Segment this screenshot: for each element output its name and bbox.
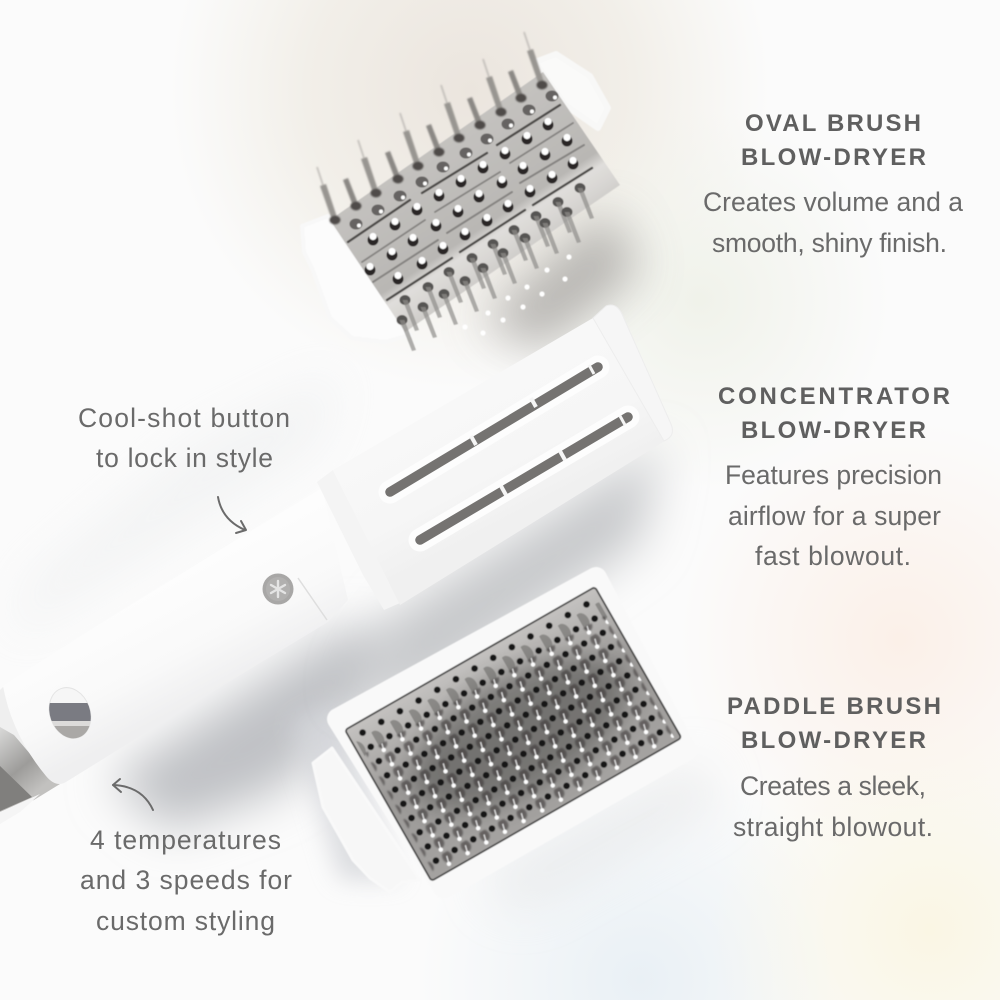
text: paddle brush description: Creates a sleek, <box>740 771 926 801</box>
oval brush blow-dryer attachment <box>302 32 620 351</box>
text: concentrator description: airflow for a super <box>728 501 941 531</box>
arrow: to cool-shot button <box>218 497 246 533</box>
heading: oval brush blow-dryer <box>741 110 926 171</box>
heading: concentrator blow-dryer: CONCENTRATOR <box>718 383 950 410</box>
callout: cool-shot button <box>78 403 290 473</box>
callout: temperatures and speeds <box>80 825 292 936</box>
heading: concentrator blow-dryer <box>718 383 950 444</box>
concentrator blow-dryer attachment <box>317 305 672 610</box>
heading: paddle brush blow-dryer: PADDLE BRUSH <box>727 693 941 720</box>
callout: cool-shot button: to lock in style <box>96 443 273 473</box>
callout: temperatures and speeds: 4 temperatures <box>90 825 281 855</box>
heading: paddle brush blow-dryer <box>727 693 941 754</box>
concentrator: body <box>333 318 670 605</box>
oval brush: hole row under the pins <box>350 90 558 230</box>
handle: neck seam <box>298 578 327 620</box>
callout: temperatures and speeds: custom styling <box>96 906 275 936</box>
heading: paddle brush blow-dryer: BLOW-DRYER <box>741 727 926 754</box>
oval brush: bright bristle tips <box>364 118 578 285</box>
paddle brush blow-dryer attachment <box>313 578 686 892</box>
heading: oval brush blow-dryer: OVAL BRUSH <box>745 110 921 137</box>
concentrator: upper air slot <box>390 365 598 492</box>
text: oval brush description: Creates volume and a <box>703 187 963 217</box>
text: concentrator description: fast blowout. <box>755 541 911 571</box>
handle: temperature window <box>48 687 92 739</box>
oval brush: lower bristles pointing down <box>396 183 594 351</box>
concentrator: front rim <box>593 305 672 441</box>
callout: cool-shot button: Cool-shot button <box>78 403 290 433</box>
handle: cool-shot button <box>262 574 294 604</box>
paddle: neck connector <box>313 748 420 892</box>
oval brush: slot lines <box>348 105 592 300</box>
paddle: metal plate with holes and bristles <box>345 587 681 881</box>
text: paddle brush description: straight blowout. <box>733 812 933 842</box>
concentrator: lower air slot <box>420 416 628 540</box>
handle: white rear section <box>0 686 50 812</box>
oval brush: white end cap left <box>302 216 410 342</box>
heading: oval brush blow-dryer: BLOW-DRYER <box>741 144 926 171</box>
oval brush: upper row of angled pins <box>317 32 548 224</box>
text: oval brush description <box>703 187 963 258</box>
arrow: to control dial <box>113 779 153 810</box>
callout: temperatures and speeds: and 3 speeds for <box>80 865 292 895</box>
handle: white bottom lip <box>0 794 40 824</box>
handle of the blow-dryer <box>0 574 328 812</box>
soft drop shadows under the tools <box>10 210 720 910</box>
paddle: white shell <box>338 578 686 888</box>
text: paddle brush description <box>733 771 933 842</box>
text: concentrator description <box>725 460 942 571</box>
concentrator: collar <box>317 470 400 610</box>
text: oval brush description: smooth, shiny finish. <box>712 228 947 258</box>
handle: silver control dial <box>0 727 60 812</box>
heading: concentrator blow-dryer: BLOW-DRYER <box>741 417 926 444</box>
handle: dark dial band <box>0 766 32 811</box>
oval brush: metal plate <box>330 72 620 332</box>
oval brush: white end cap right <box>535 54 608 128</box>
text: concentrator description: Features precision <box>725 460 942 490</box>
handle: main white barrel <box>3 488 348 784</box>
